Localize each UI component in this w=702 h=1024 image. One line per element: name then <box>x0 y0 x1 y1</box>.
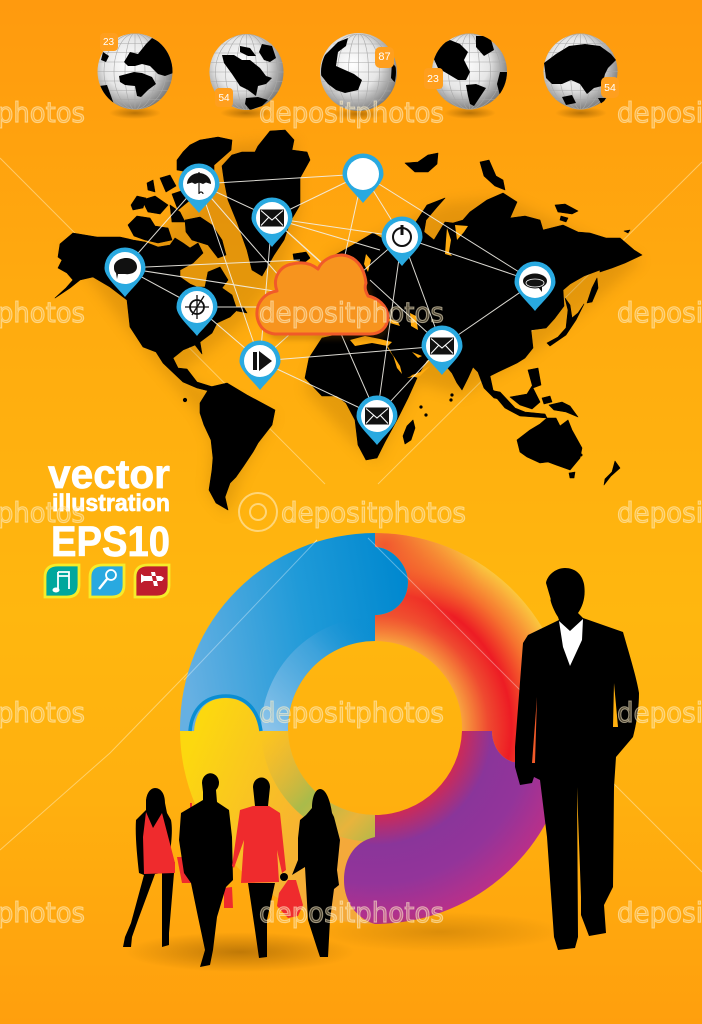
south east asia islands <box>490 390 547 418</box>
canadian arctic islands <box>177 137 232 183</box>
network lines <box>125 174 535 416</box>
south america <box>200 383 275 510</box>
globe 3 <box>320 33 398 120</box>
icon: music note <box>45 565 79 597</box>
pin: envelope <box>422 325 462 375</box>
cloud <box>257 255 389 340</box>
greenland <box>222 130 310 276</box>
badge 54: 54 <box>604 82 616 94</box>
watermarks: depositphotos <box>259 296 444 329</box>
silhouette: woman in black with bags <box>177 773 233 967</box>
silhouette: woman with red dress <box>123 788 175 947</box>
watermarks: depositphotos <box>281 496 466 529</box>
north america <box>55 233 237 391</box>
icon: magnifier <box>90 565 124 597</box>
donut decorative lines <box>184 538 550 720</box>
pin: envelope <box>356 395 398 445</box>
title text: EPS10 <box>51 518 170 566</box>
pin: blank <box>342 153 384 203</box>
title text: illustration <box>52 490 170 517</box>
watermarks: depositphotos <box>259 96 444 129</box>
silhouette: woman in red coat <box>232 778 288 958</box>
badge 23: 23 <box>103 37 114 48</box>
segment: yellow <box>180 698 375 924</box>
globe 5 <box>542 34 619 119</box>
eurasia <box>332 193 642 400</box>
segment: purple <box>344 731 567 924</box>
ring chart <box>180 533 570 924</box>
silhouette: woman in black <box>292 789 340 957</box>
badge 87: 87 <box>378 51 391 63</box>
watermarks: depositphotos <box>259 696 444 729</box>
africa <box>305 333 417 460</box>
title text: vector <box>48 451 170 497</box>
watermarks: depositphotos <box>259 896 444 929</box>
world map <box>55 130 642 515</box>
segment: blue <box>180 533 408 731</box>
pin: compass <box>176 286 218 336</box>
arctic russia islands <box>405 153 438 172</box>
ground shadow <box>125 912 565 972</box>
globe 2 <box>208 34 284 119</box>
badge 54: 54 <box>218 93 230 104</box>
badge 23: 23 <box>427 73 439 85</box>
pin: power <box>382 216 422 266</box>
pin: speech bubble <box>104 247 146 297</box>
pin: play <box>240 340 280 390</box>
silhouette: businessman <box>515 568 639 950</box>
icon: red shopping bag <box>277 880 303 918</box>
segment: red <box>375 533 570 763</box>
decorative diagonal lines <box>0 158 702 872</box>
australia <box>517 418 582 470</box>
pin: chat bubble <box>514 261 556 311</box>
globe 4 <box>424 34 508 119</box>
icon: airplane <box>135 565 169 597</box>
madagascar <box>403 420 415 444</box>
leaf icons <box>45 565 169 597</box>
globes row <box>97 33 619 120</box>
title text <box>48 451 170 566</box>
japan and sakhalin <box>547 298 584 346</box>
globe 1 <box>97 33 176 119</box>
new zealand <box>604 461 620 485</box>
inland seas <box>350 225 468 378</box>
pin: umbrella <box>178 163 220 213</box>
pin: envelope <box>252 197 292 247</box>
